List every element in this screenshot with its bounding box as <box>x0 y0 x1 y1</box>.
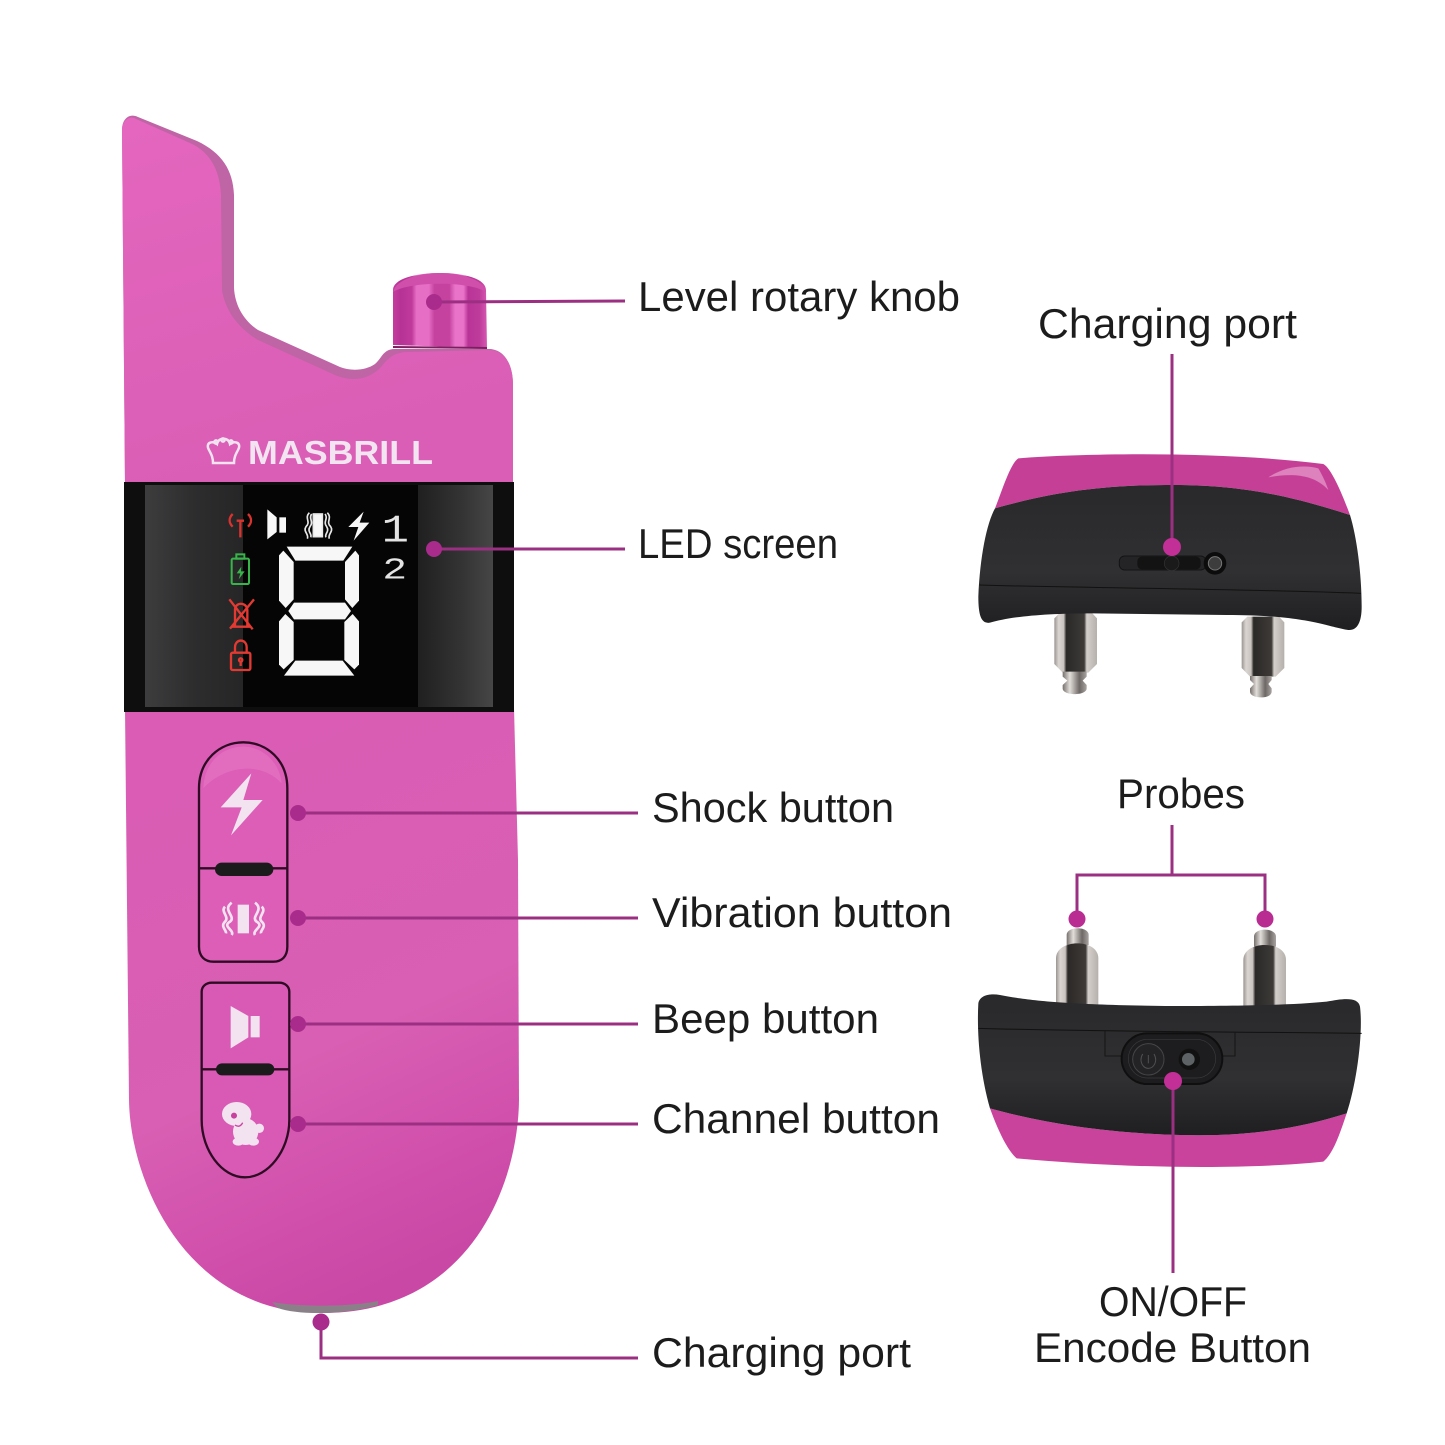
charging port cover <box>1119 552 1226 575</box>
icon: vibration <box>223 903 264 935</box>
black housing <box>978 994 1361 1135</box>
remote lower body <box>125 708 519 1313</box>
magenta base <box>990 1108 1347 1167</box>
black housing <box>978 485 1362 630</box>
icon: dog <box>222 1102 264 1146</box>
paw crown icon <box>208 438 239 463</box>
callout lines <box>290 294 1274 1358</box>
icon: lock <box>231 641 250 670</box>
label: probes: Probes <box>1117 770 1245 817</box>
label: shock button: Shock button <box>652 784 894 831</box>
icon: shock bolt <box>221 773 263 835</box>
icon: beep <box>231 1006 260 1048</box>
knob <box>393 273 487 348</box>
channel numerals <box>382 509 409 588</box>
icon: vibration <box>305 513 332 539</box>
power button <box>1122 1033 1222 1084</box>
label: collar charging port: Charging port <box>1038 300 1297 347</box>
channel numerals: 2 <box>382 553 407 588</box>
button group: beep and channel <box>202 983 289 1177</box>
remote transmitter <box>122 116 519 1313</box>
label: LED screen: LED screen <box>638 520 838 567</box>
label: channel button: Channel button <box>652 1095 940 1142</box>
icon: antenna <box>230 514 251 537</box>
LED screen <box>124 482 514 712</box>
label: vibration button: Vibration button <box>652 889 952 936</box>
label: beep button: Beep button <box>652 995 879 1042</box>
probe left <box>1056 928 1098 1007</box>
collar receiver: top view <box>978 454 1362 697</box>
label: level rotary knob: Level rotary knob <box>638 273 960 320</box>
brand logo: MASBRILL <box>248 434 433 471</box>
icon: bell muted <box>229 599 254 629</box>
label: encode button: Encode Button <box>1034 1324 1311 1371</box>
channel numerals: 1 <box>382 509 409 554</box>
icon: bolt <box>348 512 369 541</box>
label: on/off: ON/OFF <box>1099 1278 1247 1325</box>
charging port strip on the base <box>272 1301 378 1313</box>
button group: shock and vibration <box>199 742 287 962</box>
remote upper face <box>122 118 513 484</box>
label: remote charging port: Charging port <box>652 1329 911 1376</box>
probe right <box>1242 617 1284 697</box>
icon: battery <box>232 554 249 584</box>
magenta cap <box>995 454 1350 515</box>
icon: beep <box>267 509 286 539</box>
collar receiver: bottom view <box>978 928 1362 1167</box>
remote side shading <box>122 116 513 484</box>
seven segment digit <box>279 547 359 676</box>
probe left <box>1054 613 1097 694</box>
probe right <box>1243 930 1286 1008</box>
